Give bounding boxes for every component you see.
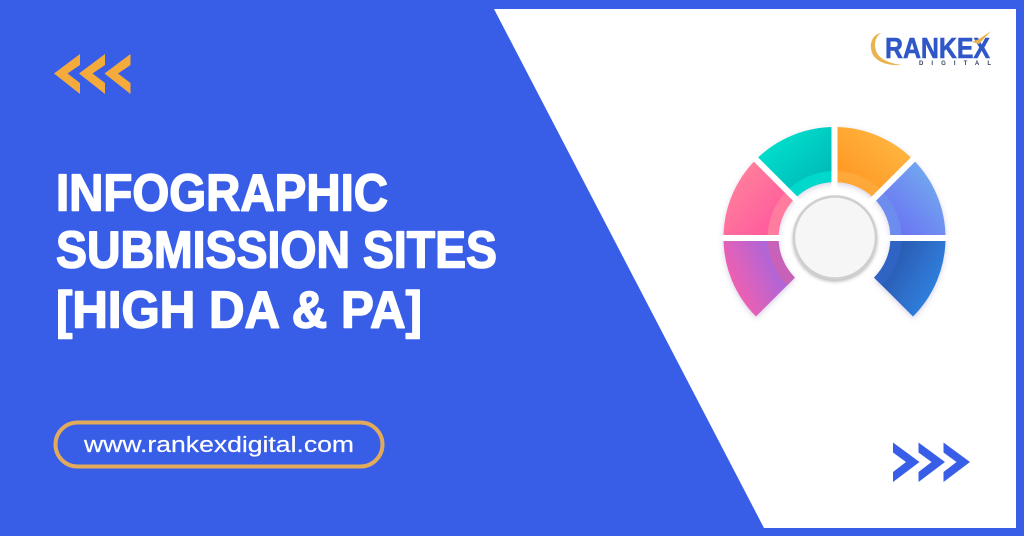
logo: Rankex Digital: RANKEX (885, 33, 991, 65)
icon: left orange chevrons (54, 54, 130, 94)
icon: right blue chevrons (893, 442, 970, 482)
website pill: www.rankexdigital.com (83, 432, 354, 457)
title: SUBMISSION SITES (56, 222, 497, 280)
centre disc (794, 196, 876, 278)
title (56, 164, 497, 340)
title: INFOGRAPHIC (56, 164, 388, 222)
gauge segments (724, 127, 946, 316)
inner lighter bands (768, 171, 902, 285)
white diagonal panel (494, 9, 1016, 528)
chart: radial gauge (720, 124, 948, 316)
segment gaps (720, 124, 948, 238)
title: [HIGH DA & PA] (56, 282, 422, 340)
website pill (56, 422, 382, 466)
logo: Rankex Digital: DIGITAL (919, 61, 991, 67)
